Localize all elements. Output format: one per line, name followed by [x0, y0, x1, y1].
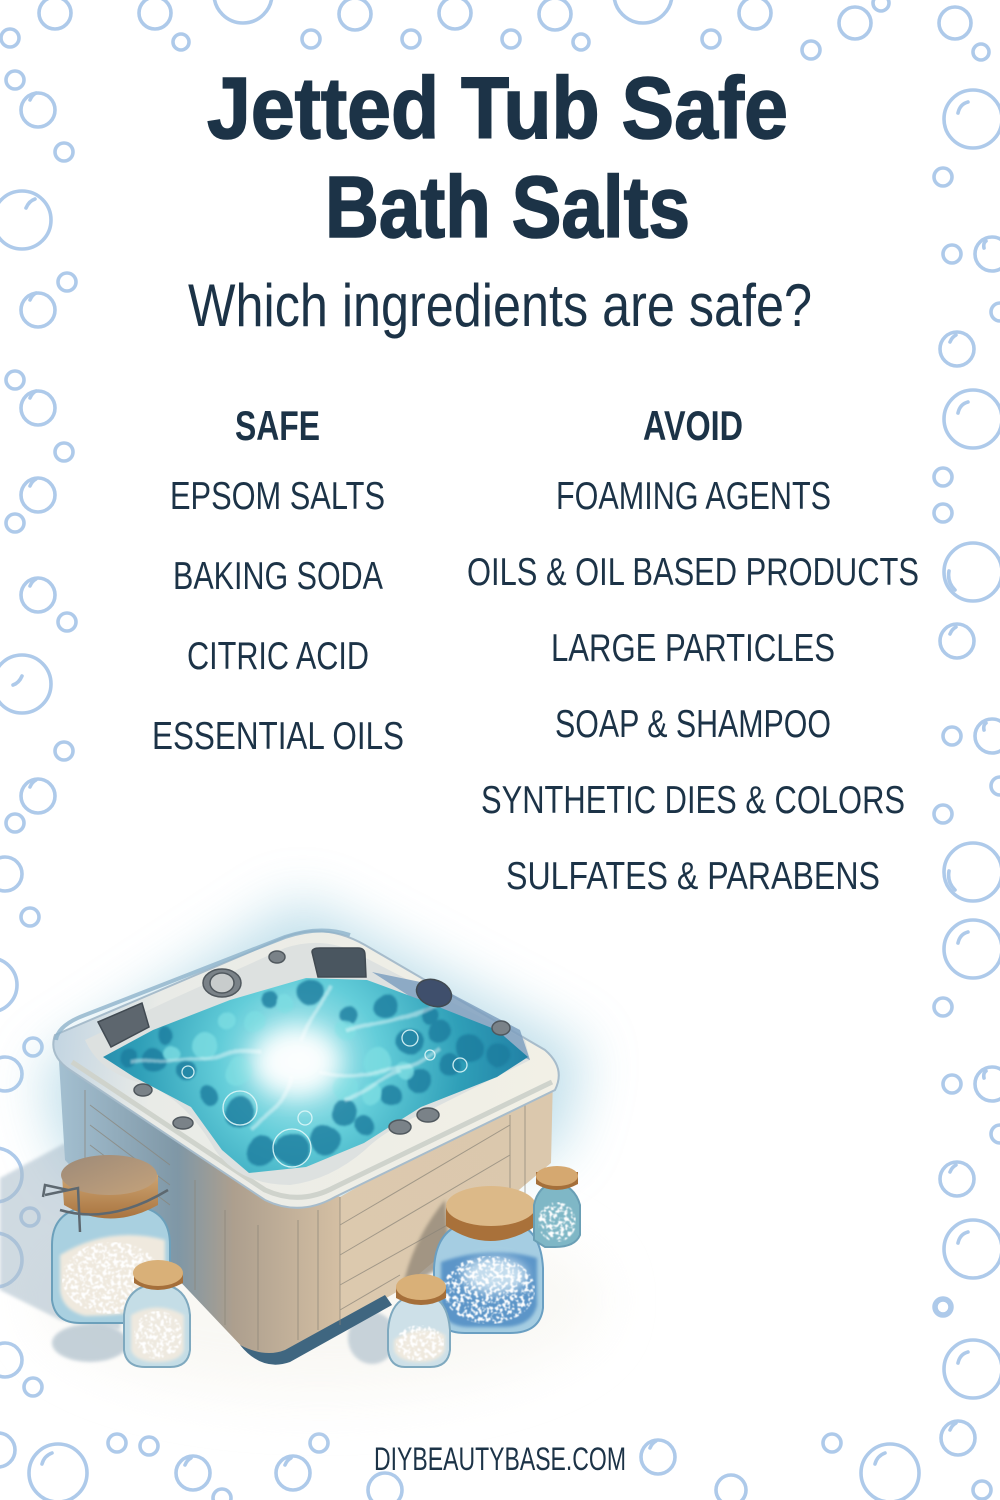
avoid item: sulfates and parabens: SULFATES & PARABENS [506, 855, 880, 898]
left bubbles [0, 71, 76, 1396]
headrests [98, 948, 455, 1047]
avoid column [467, 402, 919, 898]
safe column [152, 402, 404, 758]
illustration: hot tub with jars [0, 900, 600, 1395]
basin [85, 943, 530, 1185]
ground shadows [0, 1143, 396, 1364]
water ripples dark [119, 979, 510, 1167]
avoid heading: AVOID [643, 402, 743, 449]
subtitle: Which ingredients are safe? [188, 272, 812, 339]
water [103, 978, 528, 1173]
footer website: DIYBEAUTYBASE.COM [374, 1441, 626, 1477]
water ripples light [164, 996, 414, 1105]
avoid item: soap and shampoo: SOAP & SHAMPOO [555, 703, 831, 746]
title: Jetted Tub Safe [207, 60, 788, 157]
jar: small teal salt [534, 1166, 580, 1247]
watercolor glow [40, 900, 600, 1395]
water bubbles [182, 1030, 467, 1167]
safe item: citric acid: CITRIC ACID [187, 635, 369, 678]
safe heading: SAFE [235, 402, 320, 449]
water foam streaks [130, 985, 450, 1130]
safe item: baking soda: BAKING SODA [173, 555, 383, 598]
right bubbles [934, 90, 1000, 1398]
top bubbles [1, 0, 989, 60]
tub right face [340, 1075, 553, 1325]
back wall shade [372, 972, 530, 1060]
avoid item: foaming agents: FOAMING AGENTS [556, 475, 831, 518]
bottom bubbles [0, 1421, 991, 1500]
safe item: epsom salts: EPSOM SALTS [170, 475, 385, 518]
rim front lip [72, 1062, 552, 1197]
tub rim [53, 931, 559, 1208]
title [207, 60, 788, 256]
jar: small white salt [124, 1260, 190, 1367]
rim back edge [56, 930, 350, 1040]
safe item: essential oils: ESSENTIAL OILS [152, 715, 404, 758]
title: Bath Salts [325, 159, 690, 256]
tub base strip [240, 1295, 392, 1365]
panel lines [85, 1090, 525, 1350]
jar: blue salt [434, 1186, 543, 1333]
tub left face [58, 1045, 340, 1359]
jar: small middle salt [388, 1274, 450, 1367]
jar shadow on panel [402, 1200, 450, 1290]
avoid item: large particles: LARGE PARTICLES [551, 627, 835, 670]
jets [134, 951, 510, 1134]
water foam centre [252, 1028, 340, 1096]
jar: large white salt [43, 1155, 170, 1323]
